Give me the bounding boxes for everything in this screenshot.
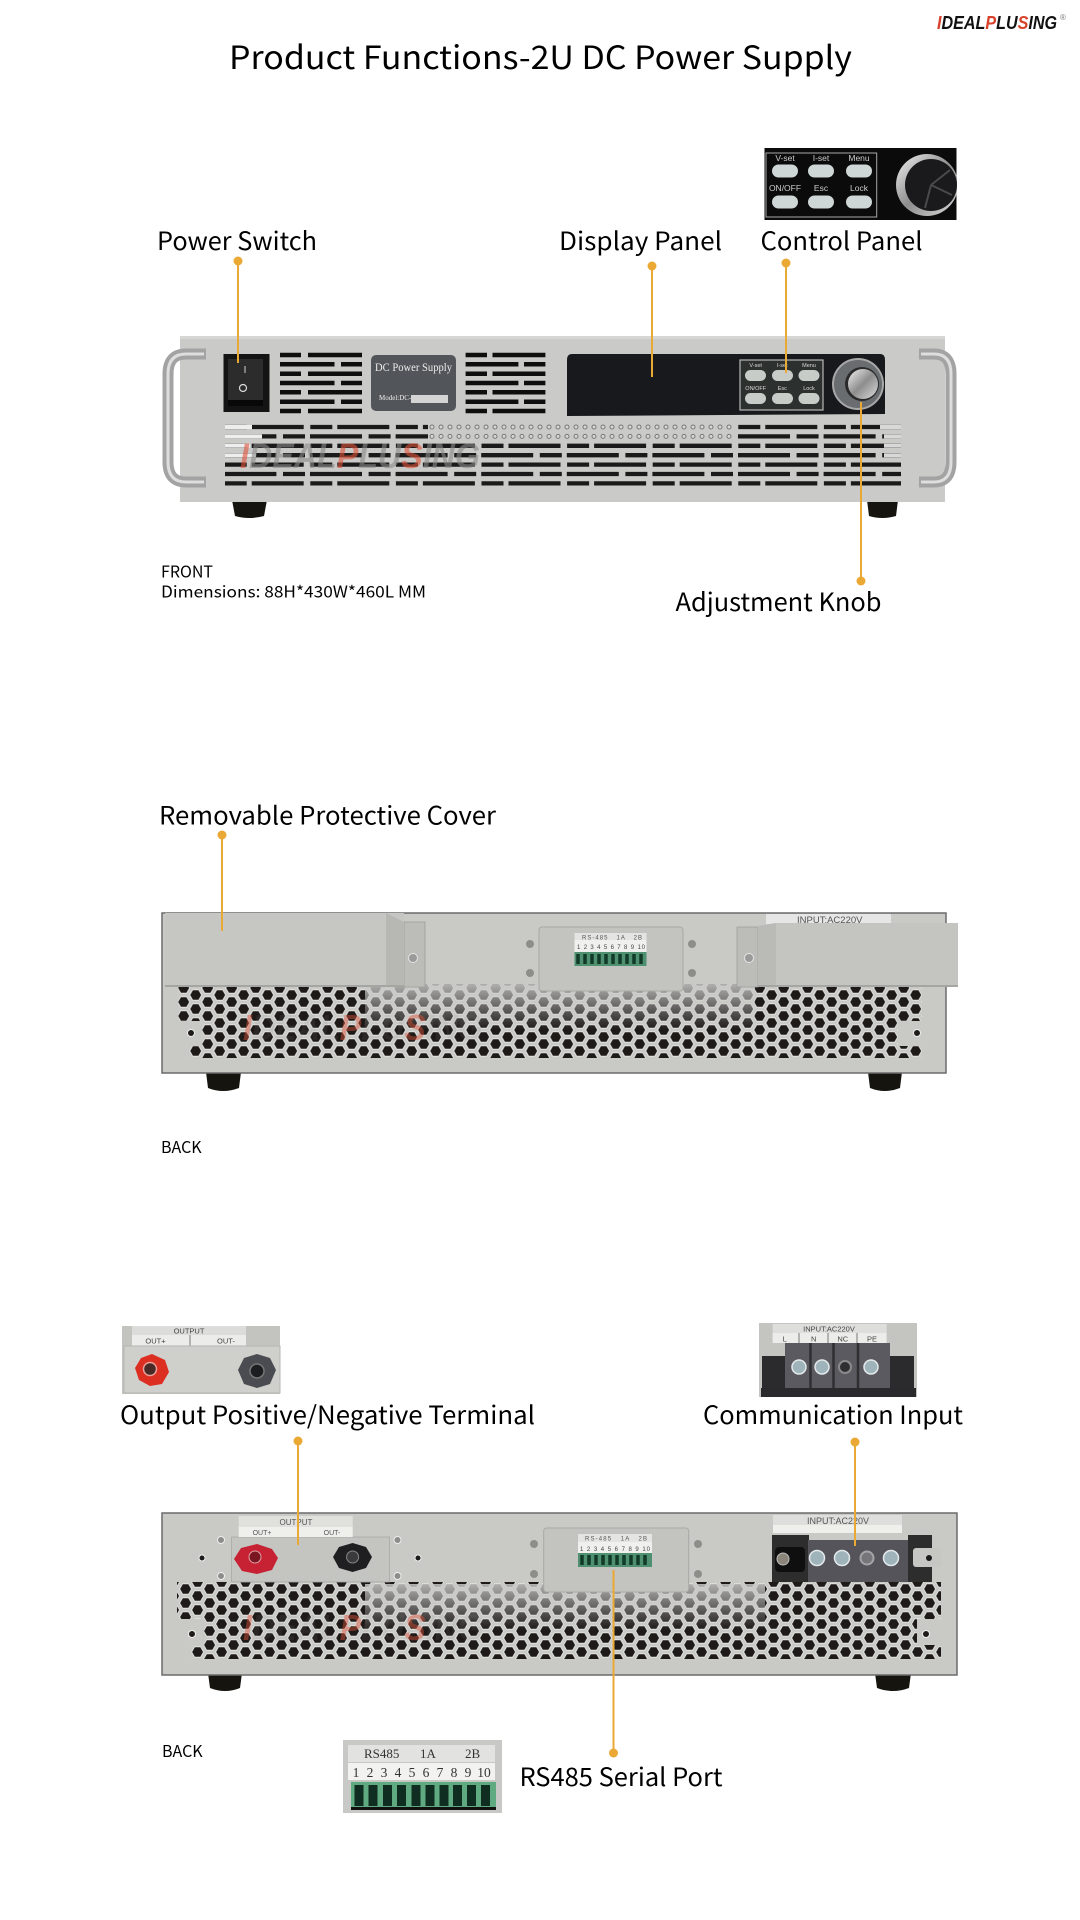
label: adjustment knob: Adjustment Knob	[676, 583, 882, 619]
vent side holes	[188, 1030, 920, 1036]
inset: control panel close-up: ON/OFF	[769, 183, 801, 193]
label: RS485 serial port: RS485 Serial Port	[520, 1758, 723, 1794]
panel: back view without covers	[162, 1513, 957, 1691]
watermark on back: IDEALPLUSING	[243, 1607, 483, 1648]
watermark on front: IDEALPLUSING	[240, 437, 480, 476]
upper vent grilles	[280, 355, 545, 411]
inset: input terminals close-up: N	[811, 1334, 816, 1344]
output panel on chassis: OUT-	[324, 1530, 341, 1537]
inset: RS485 connector close-up	[343, 1740, 502, 1813]
caption: front dimensions: FRONT	[161, 558, 213, 582]
output panel on chassis: OUTPUT	[280, 1518, 313, 1527]
label: removable protective cover: Removable Protective Cover	[159, 796, 496, 832]
inset: input terminals close-up: PE	[867, 1334, 877, 1344]
button panel: I-set	[777, 363, 788, 369]
RS485 centre panel	[530, 1528, 702, 1592]
callout line: RS485	[609, 1570, 618, 1758]
inset: output terminals close-up: OUT+	[145, 1336, 166, 1346]
inset: input terminals close-up	[759, 1323, 917, 1397]
left protective cover	[165, 913, 425, 987]
label: power switch: Power Switch	[157, 222, 317, 258]
title: Product Functions-2U DC Power Supply	[229, 33, 852, 79]
inset: RS485 connector close-up: 10	[477, 1765, 491, 1780]
inset: control panel close-up: Lock	[850, 183, 869, 193]
inset: input terminals close-up: NC	[837, 1334, 849, 1344]
label: display panel: Display Panel	[559, 222, 722, 258]
vent side holes	[188, 1630, 930, 1638]
button panel	[740, 360, 823, 410]
inset: output terminals close-up: OUT-	[217, 1336, 235, 1346]
feet	[206, 1072, 902, 1091]
inset: control panel close-up: I-set	[813, 153, 830, 163]
RS485 centre panel: 1 2 3 4 5 6 7 8 9 10	[580, 1547, 651, 1553]
inset: input terminals close-up: INPUT:AC220V	[803, 1324, 855, 1334]
inset: RS485 connector close-up: 2	[367, 1765, 373, 1780]
power switch: I	[244, 365, 246, 376]
feet	[208, 1673, 911, 1691]
caption: back: BACK	[162, 1738, 203, 1762]
RS485 centre panel: RS-485 1A 2B	[585, 1536, 647, 1542]
callout line: control panel	[782, 258, 790, 373]
inset: RS485 connector close-up: 5	[409, 1765, 416, 1780]
inset: output terminals close-up: OUTPUT	[174, 1326, 205, 1336]
hex vent	[178, 984, 922, 1058]
inset: RS485 connector close-up: 2B	[465, 1746, 480, 1761]
inset: control panel close-up: Esc	[814, 183, 829, 193]
watermark on back: IDEALPLUSING	[243, 1007, 483, 1048]
inset: output terminals close-up	[122, 1326, 280, 1394]
button panel: Menu	[802, 363, 816, 369]
inset: control panel close-up: Menu	[848, 153, 870, 163]
panel: front view	[168, 336, 951, 518]
button panel: Lock	[803, 386, 815, 392]
inset: RS485 connector close-up: 4	[395, 1765, 402, 1780]
hex vent	[177, 1582, 941, 1659]
inset: RS485 connector close-up: 6	[423, 1765, 430, 1780]
caption: back: BACK	[161, 1134, 202, 1158]
label: control panel: Control Panel	[760, 222, 922, 258]
label: output terminal: Output Positive/Negative Terminal	[120, 1396, 535, 1432]
callout line: communication input	[850, 1438, 860, 1546]
input terminal block: INPUT:AC220V	[807, 1516, 869, 1526]
inset: input terminals close-up: L	[783, 1334, 787, 1344]
inset: RS485 connector close-up: RS485	[364, 1746, 399, 1761]
input label strip: INPUT:AC220V	[797, 915, 863, 926]
inset: RS485 connector close-up: 7	[437, 1765, 444, 1780]
button panel: ON/OFF	[745, 386, 767, 392]
inset: control panel close-up: V-set	[775, 153, 795, 163]
RS485 centre panel	[526, 927, 696, 991]
left handle	[168, 354, 206, 482]
caption: front dimensions: Dimensions: 88H*430W*460L MM	[161, 578, 426, 602]
output panel on chassis: OUT+	[253, 1530, 271, 1537]
RS485 centre panel: 1 2 3 4 5 6 7 8 9 10	[577, 945, 646, 951]
button panel: Esc	[778, 386, 787, 392]
inset: RS485 connector close-up: 8	[451, 1765, 458, 1780]
chassis	[180, 336, 945, 502]
input terminal block	[772, 1515, 941, 1582]
chassis	[162, 1513, 957, 1675]
chassis	[162, 913, 946, 1073]
panel: back view with covers	[162, 913, 958, 1091]
model plate: DC Power Supply	[375, 360, 452, 374]
right protective cover	[737, 923, 958, 987]
adjustment knob	[833, 359, 883, 409]
model plate: Model:DC-	[379, 394, 412, 402]
output panel on chassis	[199, 1516, 421, 1582]
button panel: V-set	[749, 363, 762, 369]
model plate	[371, 355, 456, 411]
callout line: removable cover	[218, 830, 226, 931]
inset: RS485 connector close-up: 3	[381, 1765, 388, 1780]
logo: ®	[1060, 13, 1066, 22]
callout line: adjustment knob	[856, 402, 866, 586]
right handle	[919, 354, 951, 482]
caption: front dimensions	[161, 558, 426, 602]
inset: RS485 connector close-up: 1A	[420, 1746, 436, 1761]
RS485 centre panel: RS-485 1A 2B	[582, 936, 642, 942]
logo: IDEALPLUSING	[937, 12, 1057, 33]
label: communication input: Communication Input	[703, 1396, 964, 1432]
input label strip	[766, 914, 891, 926]
inset: RS485 connector close-up: 9	[465, 1765, 472, 1780]
feet	[232, 500, 898, 518]
inset: control panel close-up	[764, 148, 958, 220]
power switch	[224, 354, 270, 412]
callout line: output terminal	[294, 1436, 302, 1545]
callout line: power switch	[234, 256, 242, 363]
callout line: display panel	[648, 262, 656, 377]
inset: RS485 connector close-up: 1	[353, 1765, 359, 1780]
display panel	[567, 354, 885, 416]
lower vent grille	[225, 427, 901, 483]
